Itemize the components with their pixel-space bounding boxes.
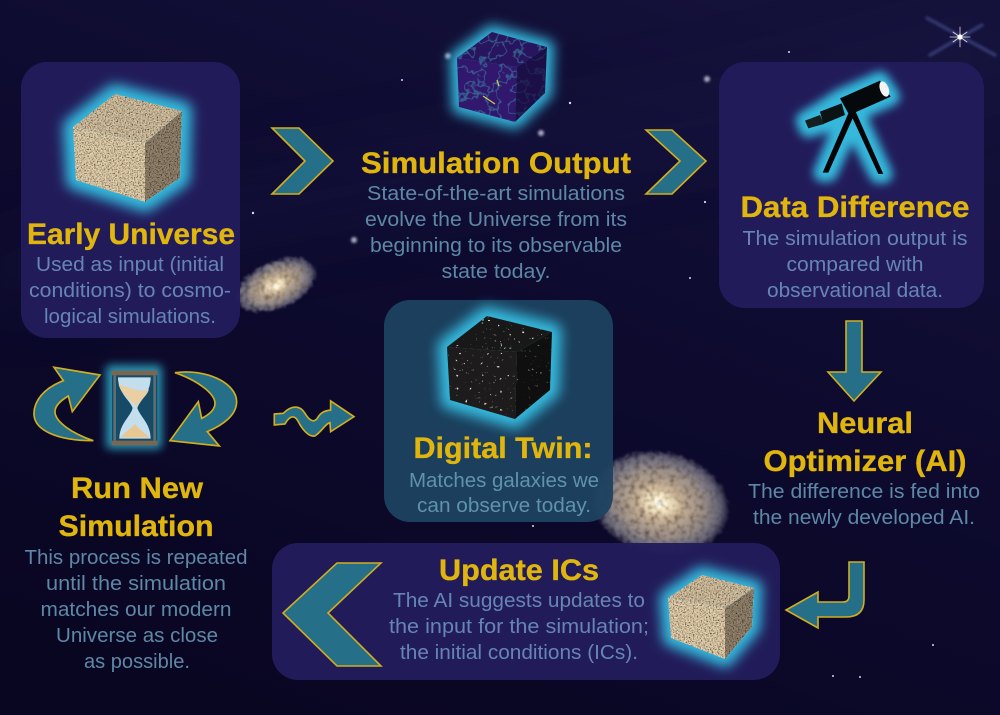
icon: simulation output cube bbox=[457, 32, 547, 122]
text: Digital Twin description bbox=[409, 470, 599, 517]
icon: update ICs cube bbox=[668, 575, 754, 659]
text: Update ICs description: The AI suggests updates to bbox=[393, 590, 645, 612]
text: Simulation Output description: evolve the Universe from its bbox=[365, 209, 627, 231]
heading: Early Universe: Early Universe bbox=[27, 218, 235, 251]
text: Update ICs description: the input for the simulation; bbox=[389, 616, 649, 638]
text: Digital Twin description: Matches galaxies we bbox=[409, 470, 599, 492]
arrow: neural optimizer to update ICs bbox=[786, 562, 864, 628]
text: Run New Simulation description: Universe as close bbox=[56, 625, 218, 647]
star flare top right bbox=[927, 3, 995, 80]
text: Digital Twin description: can observe today. bbox=[417, 495, 591, 517]
text: Run New Simulation description bbox=[24, 547, 248, 673]
heading: Run New Simulation: Simulation bbox=[58, 510, 213, 543]
heading: Update ICs: Update ICs bbox=[439, 554, 599, 587]
text: Early Universe description bbox=[29, 254, 231, 328]
heading: Data Difference: Data Difference bbox=[740, 191, 970, 224]
arrow: data difference down to neural optimizer bbox=[828, 321, 881, 401]
panel: data difference background bbox=[719, 62, 984, 308]
text: Data Difference description bbox=[742, 228, 968, 302]
galaxy: large spiral behind Digital Twin panel bbox=[581, 438, 739, 568]
arrow: large chevron toward run new simulation bbox=[283, 563, 381, 666]
text: Run New Simulation description: until the simulation bbox=[46, 573, 226, 595]
arrow: circular right bbox=[170, 372, 237, 446]
text: Simulation Output description: State-of-the-art simulations bbox=[367, 183, 625, 205]
arrow: simulation output to data difference bbox=[646, 130, 706, 194]
text: Simulation Output description: beginning to its observable bbox=[370, 235, 622, 257]
text: Early Universe description: Used as input (initial bbox=[36, 254, 224, 276]
arrow: wavy toward digital twin bbox=[274, 401, 354, 436]
text: Data Difference description: The simulation output is bbox=[742, 228, 968, 250]
text: Neural Optimizer description: the newly developed AI. bbox=[753, 507, 975, 529]
arrow: early universe to simulation output bbox=[272, 128, 333, 194]
icon: hourglass bbox=[106, 365, 162, 449]
text: Data Difference description: compared with bbox=[786, 254, 924, 276]
arrow: circular left bbox=[34, 367, 100, 441]
text: Update ICs description bbox=[389, 590, 649, 664]
panel: update ICs background bbox=[272, 543, 780, 680]
icon: telescope bbox=[805, 80, 891, 174]
text: Run New Simulation description: as possible. bbox=[84, 651, 190, 673]
heading: Neural Optimizer (AI) bbox=[764, 407, 966, 478]
heading: Simulation Output: Simulation Output bbox=[361, 147, 631, 180]
galaxy: small spiral behind Early Universe panel bbox=[227, 246, 325, 324]
text: Data Difference description: observational data. bbox=[767, 280, 943, 302]
icon: digital twin cube bbox=[447, 316, 552, 419]
text: Early Universe description: conditions) to cosmo- bbox=[29, 280, 231, 302]
text: Neural Optimizer description: The difference is fed into bbox=[748, 481, 980, 503]
heading: Neural Optimizer (AI): Neural bbox=[817, 407, 913, 440]
text: Simulation Output description: state today. bbox=[442, 261, 550, 283]
panel: early universe background bbox=[21, 62, 240, 338]
heading: Run New Simulation: Run New bbox=[71, 472, 204, 505]
text: Update ICs description: the initial conditions (ICs). bbox=[400, 642, 638, 664]
heading: Run New Simulation bbox=[58, 472, 213, 543]
text: Run New Simulation description: matches our modern bbox=[40, 599, 232, 621]
heading: Digital Twin: Digital Twin: bbox=[414, 432, 592, 465]
panel: digital twin background bbox=[384, 300, 613, 522]
text: Run New Simulation description: This process is repeated bbox=[24, 547, 248, 569]
text: Neural Optimizer description bbox=[748, 481, 980, 529]
text: Simulation Output description bbox=[365, 183, 627, 283]
heading: Neural Optimizer (AI): Optimizer (AI) bbox=[764, 445, 966, 478]
icon: early universe cube bbox=[73, 94, 182, 202]
text: Early Universe description: logical simulations. bbox=[44, 306, 216, 328]
